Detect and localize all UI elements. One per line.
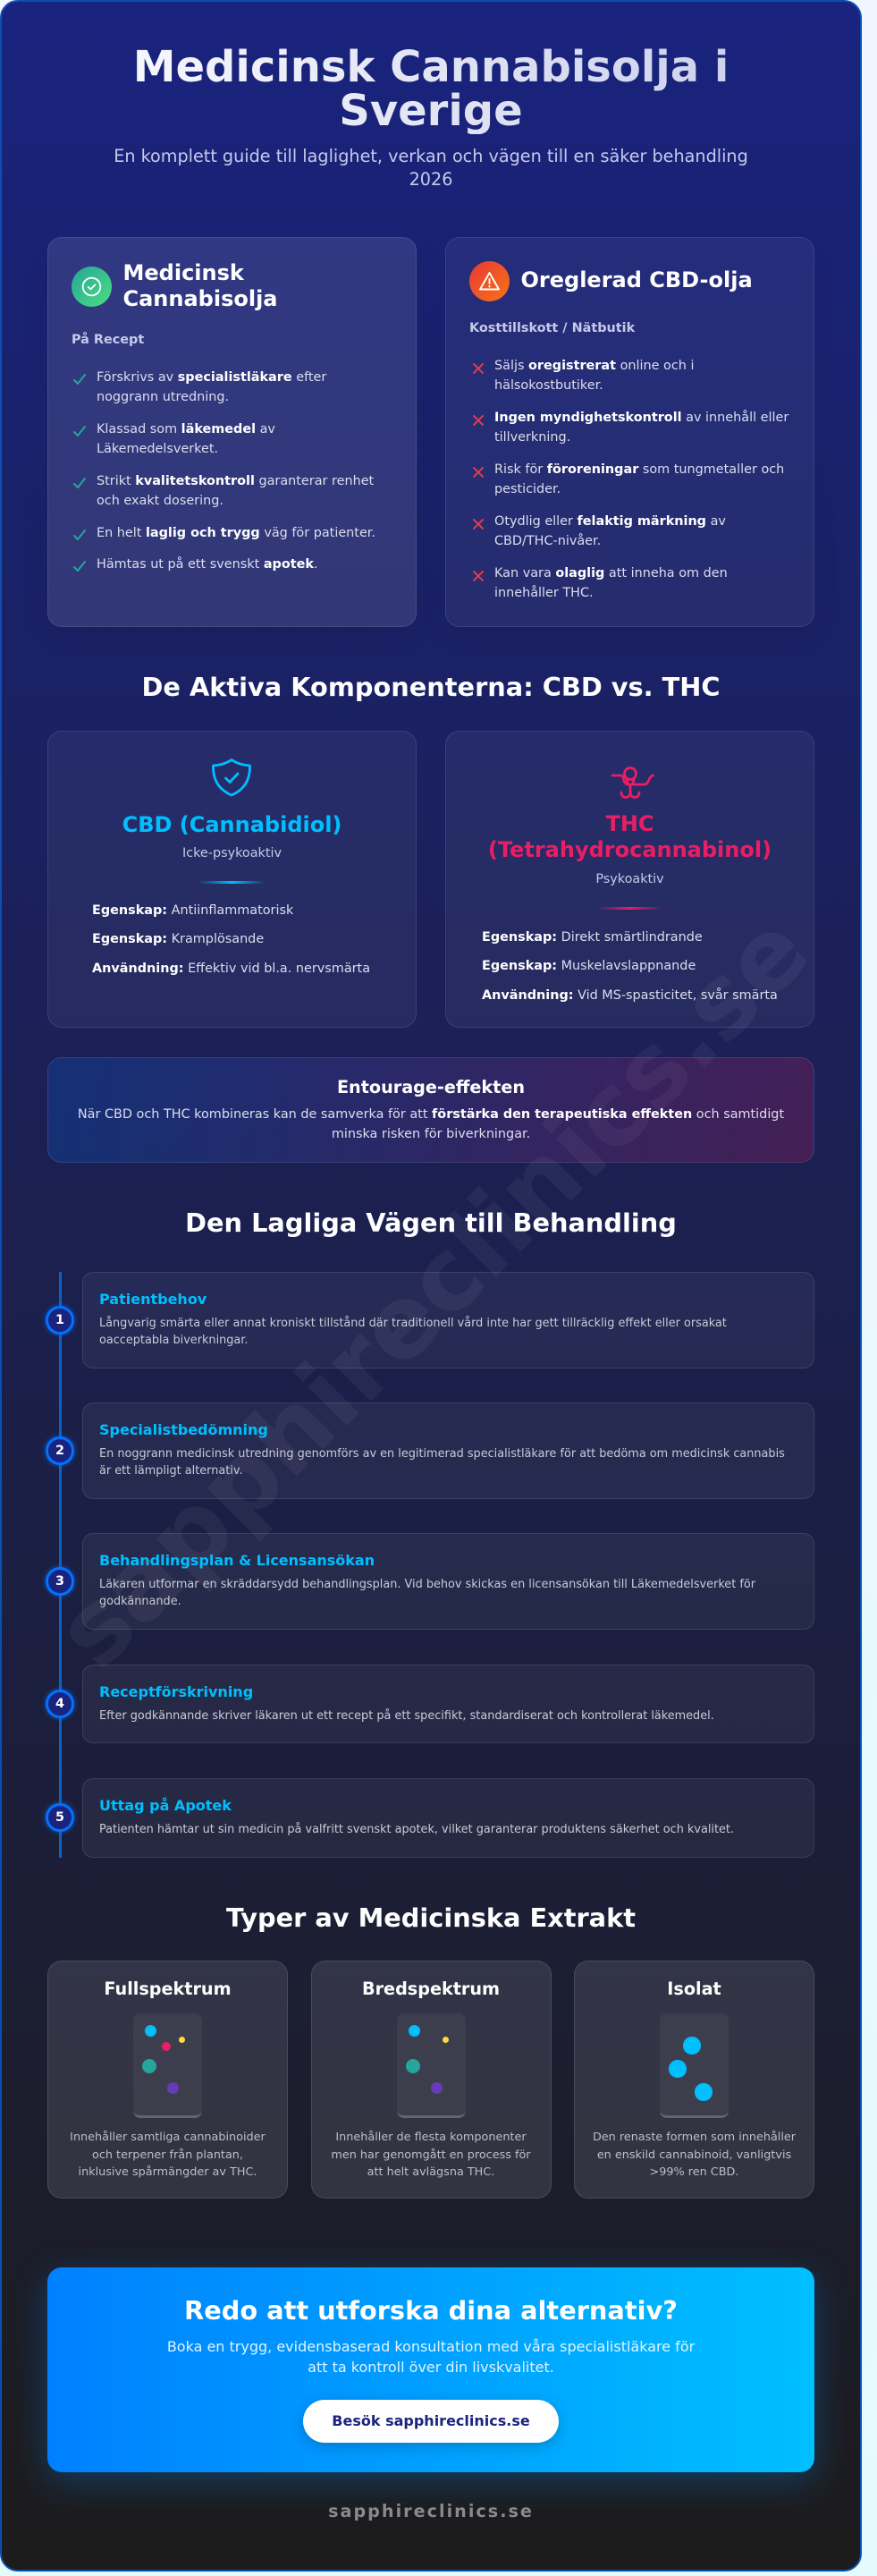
properties	[482, 930, 778, 1002]
divider	[198, 881, 266, 884]
heading: lagliga vägen: Den Lagliga Vägen till Behandling	[185, 1208, 677, 1238]
step text	[99, 1447, 785, 1478]
extract text	[70, 2131, 266, 2179]
extract text: och terpener från plantan,	[92, 2148, 243, 2161]
cta text: Boka en trygg, evidensbaserad konsultation med våra specialistläkare för	[167, 2338, 695, 2355]
step text	[99, 1578, 756, 1608]
panel: CBD	[47, 731, 417, 1028]
cbd subtitle: Icke-psykoaktiv	[182, 846, 282, 860]
properties	[92, 903, 370, 975]
step text: Läkaren utformar en skräddarsydd behandlingsplan. Vid behov skickas en licensansökan till Läkemedelsverket för	[99, 1578, 755, 1591]
dot purple	[431, 2082, 442, 2094]
step 2	[42, 1402, 814, 1499]
extract text	[331, 2131, 531, 2179]
number 2	[46, 1436, 74, 1465]
dot green	[406, 2059, 420, 2073]
item 1: hälsokostbutiker.	[494, 378, 603, 393]
number 1	[46, 1306, 74, 1335]
heading: Oreglerad CBD-olja	[520, 267, 753, 292]
step title: Uttag på Apotek	[99, 1797, 232, 1814]
number 3	[46, 1567, 74, 1596]
number 3: 3	[55, 1574, 64, 1589]
number 2: 2	[55, 1444, 64, 1458]
cta text: att ta kontroll över din livskvalitet.	[308, 2359, 554, 2376]
heading: typer av extrakt: Typer av Medicinska Extrakt	[226, 1902, 636, 1933]
item 4: Otydlig eller felaktig märkning av	[494, 514, 726, 529]
cta text	[47, 2337, 814, 2378]
thc title	[488, 811, 772, 862]
item 3: pesticider.	[494, 482, 561, 496]
item 1	[494, 359, 694, 393]
item 5: Kan vara olaglig att inneha om den	[494, 566, 728, 580]
item 5	[494, 566, 728, 600]
item 3	[494, 462, 784, 496]
step text	[99, 1316, 727, 1347]
extract text	[575, 2129, 814, 2181]
subtitle	[114, 146, 748, 190]
item 3: och exakt dosering.	[97, 494, 223, 508]
item 2: Klassad som läkemedel av	[97, 422, 275, 436]
item 4	[494, 514, 726, 548]
dot blue 2	[669, 2060, 687, 2077]
step text: Patienten hämtar ut sin medicin på valfritt svenskt apotek, vilket garanterar produktens säkerhet och kvalitet.	[99, 1823, 734, 1836]
extract text: inklusive spårmängder av THC.	[79, 2165, 257, 2179]
heading: aktiva komponenterna: De Aktiva Komponenterna: CBD vs. THC	[141, 672, 721, 702]
heading: Cannabisolja	[123, 286, 278, 311]
dot purple	[167, 2082, 179, 2094]
title	[0, 46, 862, 134]
extract text: >99% ren CBD.	[650, 2165, 738, 2179]
icon: jar with four dots	[397, 2013, 465, 2118]
icon: jar with five dots	[133, 2013, 202, 2118]
cta button	[303, 2400, 559, 2443]
icon: shield	[212, 758, 251, 796]
heading: Medicinsk	[123, 260, 244, 285]
dot blue	[408, 2025, 420, 2037]
item 2: Ingen myndighetskontroll av innehåll eller	[494, 411, 788, 425]
divider	[596, 907, 663, 910]
step text: är ett lämpligt alternativ.	[99, 1464, 243, 1478]
item 3: Risk för föroreningar som tungmetaller och	[494, 462, 784, 477]
number 5	[46, 1803, 74, 1832]
extract text: Innehåller de flesta komponenter	[335, 2131, 527, 2144]
step text: oacceptabla biverkningar.	[99, 1334, 249, 1347]
step text: Långvarig smärta eller annat kroniskt tillstånd där traditionell vård inte har gett tillräcklig effekt eller orsakat	[99, 1317, 727, 1330]
subtitle: En komplett guide till laglighet, verkan och vägen till en säker behandling	[114, 146, 748, 166]
number 4: 4	[55, 1697, 64, 1711]
title: Sverige	[339, 86, 523, 136]
heading	[123, 260, 278, 311]
extract text: Den renaste formen som innehåller	[593, 2131, 796, 2144]
icons: checks	[73, 374, 86, 572]
sub label: På Recept	[72, 333, 144, 347]
call to action	[47, 2267, 814, 2472]
dot yellow	[442, 2037, 449, 2043]
number 5: 5	[55, 1810, 64, 1825]
step 2 card	[82, 1402, 814, 1499]
item 2: Läkemedelsverket.	[97, 442, 218, 456]
item 1: Förskrivs av specialistläkare efter	[97, 370, 326, 385]
item 1: noggrann utredning.	[97, 390, 229, 404]
step 4 card	[82, 1665, 814, 1743]
extract text: men har genomgått en process för	[331, 2148, 531, 2161]
number 4	[46, 1690, 74, 1718]
list: benefits	[73, 370, 375, 572]
step 3 card	[82, 1533, 814, 1630]
dot blue 1	[683, 2037, 701, 2054]
icons: crosses	[473, 363, 484, 581]
step 3	[42, 1533, 814, 1630]
icon: jar with three dots	[660, 2013, 729, 2118]
step title: Behandlingsplan & Licensansökan	[99, 1552, 375, 1569]
list: risks	[473, 359, 788, 600]
cbd title: CBD (Cannabidiol)	[122, 812, 342, 837]
callout: entourage	[47, 1057, 814, 1163]
step title: Receptförskrivning	[99, 1683, 253, 1700]
item 5: innehåller THC.	[494, 586, 594, 600]
step 5	[42, 1778, 814, 1858]
icon: green check	[72, 267, 112, 307]
panel: medicinsk cannabisolja	[47, 237, 417, 627]
step title: Specialistbedömning	[99, 1421, 268, 1438]
icon: thc molecule	[611, 767, 654, 799]
extract title: Isolat	[667, 1979, 721, 1999]
icon: warning	[469, 261, 510, 301]
property 1: Egenskap: Direkt smärtlindrande	[482, 930, 703, 945]
subtitle: 2026	[409, 169, 452, 190]
step text: godkännande.	[99, 1595, 181, 1608]
panel: bredspektrum	[311, 1961, 551, 2199]
footer: sapphireclinics.se	[328, 2501, 534, 2521]
extract text: att helt avlägsna THC.	[367, 2165, 494, 2179]
extract title: Fullspektrum	[104, 1979, 232, 1999]
number 1: 1	[55, 1313, 64, 1327]
entourage text	[78, 1107, 784, 1141]
item 4: En helt laglig och trygg väg för patienter.	[97, 526, 375, 540]
entourage title: Entourage-effekten	[337, 1077, 525, 1097]
dot pink	[162, 2042, 171, 2051]
panel: oreglerad cbd-olja	[445, 237, 814, 627]
step 1	[42, 1272, 814, 1368]
item 1	[97, 370, 327, 404]
thc title: (Tetrahydrocannabinol)	[488, 837, 772, 862]
item 4: CBD/THC-nivåer.	[494, 534, 601, 548]
step title: Patientbehov	[99, 1291, 207, 1308]
step 5 card	[82, 1778, 814, 1858]
panel: fullspektrum	[47, 1961, 288, 2199]
entourage text: minska risken för biverkningar.	[332, 1127, 530, 1141]
panel: isolat	[574, 1961, 814, 2199]
step 1 card	[82, 1272, 814, 1368]
item 3	[97, 474, 374, 508]
panel: THC	[445, 731, 814, 1028]
cta title: Redo att utforska dina alternativ?	[184, 2295, 678, 2326]
property 1: Egenskap: Antiinflammatorisk	[92, 903, 293, 918]
extract text: en enskild cannabinoid, vanligtvis	[597, 2148, 791, 2161]
dot green	[142, 2059, 156, 2073]
item 2	[97, 422, 275, 456]
extract text: Innehåller samtliga cannabinoider	[70, 2131, 266, 2144]
extract title: Bredspektrum	[362, 1979, 500, 1999]
item 2: tillverkning.	[494, 430, 570, 445]
title: Medicinsk Cannabisolja i	[133, 42, 729, 92]
item 5: Hämtas ut på ett svenskt apotek.	[97, 557, 318, 572]
dot yellow	[179, 2037, 185, 2043]
dot blue	[145, 2025, 156, 2037]
item 1: Säljs oregistrerat online och i	[494, 359, 694, 373]
step text: Efter godkännande skriver läkaren ut ett recept på ett specifikt, standardiserat och kontrollerat läkemedel.	[99, 1709, 714, 1723]
property 2: Egenskap: Kramplösande	[92, 932, 264, 946]
timeline line	[59, 1272, 61, 1858]
property 3: Användning: Vid MS-spasticitet, svår smärta	[482, 987, 778, 1002]
sub label: Kosttillskott / Nätbutik	[469, 321, 635, 335]
entourage text: När CBD och THC kombineras kan de samverka för att förstärka den terapeutiska effekten och samtidigt	[78, 1107, 784, 1122]
step text: En noggrann medicinsk utredning genomförs av en legitimerad specialistläkare för att bedöma om medicinsk cannabis	[99, 1447, 785, 1461]
item 3: Strikt kvalitetskontroll garanterar renhet	[97, 474, 374, 488]
property 2: Egenskap: Muskelavslappnande	[482, 959, 696, 973]
property 3: Användning: Effektiv vid bl.a. nervsmärta	[92, 961, 370, 975]
step 4	[42, 1665, 814, 1743]
item 2	[494, 410, 788, 445]
thc subtitle: Psykoaktiv	[595, 872, 664, 886]
thc title: THC	[605, 811, 654, 836]
dot blue 3	[695, 2083, 712, 2100]
watermark: sapphireclinics.se	[34, 893, 831, 1690]
cta button: Besök sapphireclinics.se	[332, 2412, 530, 2429]
